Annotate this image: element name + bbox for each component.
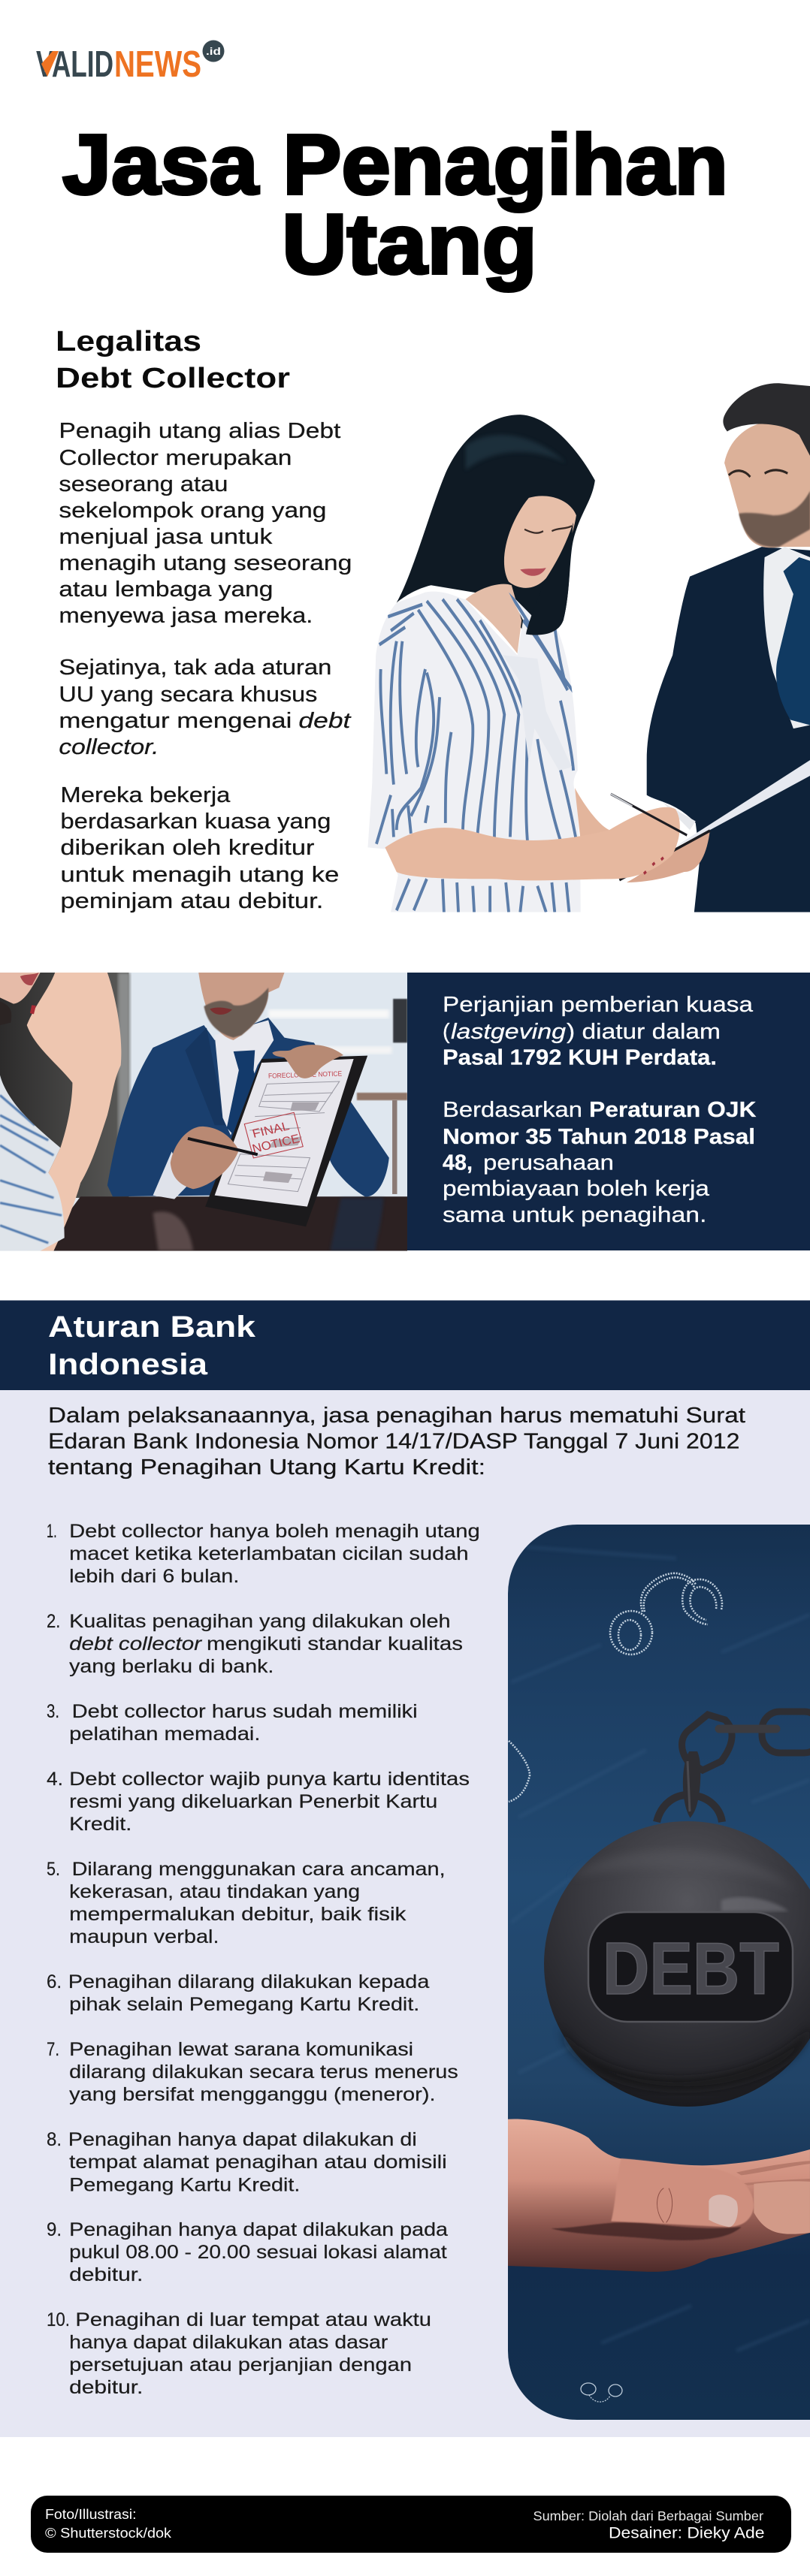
chalkboard brush streaks <box>511 1547 810 2351</box>
open hand <box>508 2119 810 2272</box>
logo: Validnews.id: NEWS <box>114 44 201 85</box>
rule 9: debitur. <box>69 2264 143 2285</box>
table <box>41 1196 407 1251</box>
heading: Legalitas Debt Collector <box>56 326 290 394</box>
rule 10: Penagihan di luar tempat atau waktu <box>75 2309 431 2330</box>
rule 2: mengikuti standar kualitas <box>207 1633 463 1654</box>
rule 4: 4. <box>47 1769 63 1790</box>
source and designer: Desainer: Dieky Ade <box>609 2525 765 2541</box>
rule 8: Penagihan hanya dapat dilakukan di <box>68 2129 417 2150</box>
rule 5: mempermalukan debitur, baik fisik <box>69 1904 407 1925</box>
source and designer <box>533 2508 765 2541</box>
rule 8: 8. <box>47 2129 62 2150</box>
text: Pasal 1792: ( <box>443 1020 450 1044</box>
text: Peraturan OJK: Peraturan OJK <box>589 1098 757 1122</box>
woman arm and hand <box>575 788 609 840</box>
rule 8: Pemegang Kartu Kredit. <box>69 2175 300 2196</box>
rule 1: 1. <box>47 1521 57 1542</box>
clipboard and man hand <box>627 830 710 882</box>
text block: definition of debt collector: seseorang atau <box>59 472 228 496</box>
panel: legal basis <box>407 973 810 1250</box>
section background: Aturan Bank Indonesia <box>0 1390 810 2437</box>
text: Peraturan OJK: Nomor 35 Tahun 2018 Pasal <box>443 1125 755 1149</box>
text block: intro regulation: Dalam pelaksanaannya, jasa penagihan harus mematuhi Surat <box>48 1404 745 1428</box>
heading band: Aturan Bank Indonesia <box>0 1301 810 1390</box>
rule 7: yang bersifat mengganggu (meneror). <box>69 2084 436 2105</box>
heading band: Aturan Bank Indonesia: Aturan Bank <box>48 1311 256 1344</box>
rule 5: maupun verbal. <box>69 1926 219 1947</box>
woman neck <box>466 584 521 653</box>
logo: Validnews.id <box>36 41 224 85</box>
text block: power of attorney: Mereka bekerja <box>60 783 231 807</box>
heading: Legalitas Debt Collector: Legalitas <box>56 326 201 357</box>
rule 6: 6. <box>47 1971 62 1992</box>
rule 4: Kredit. <box>69 1814 131 1835</box>
man suit <box>107 1018 389 1196</box>
text block: definition of debt collector: atau lembaga yang <box>59 578 273 602</box>
woman face <box>504 496 576 588</box>
rule 4: resmi yang dikeluarkan Penerbit Kartu <box>69 1791 437 1812</box>
text block: intro regulation: tentang Penagihan Utang Kartu Kredit: <box>48 1455 485 1480</box>
text block: definition of debt collector: menyewa jasa mereka. <box>59 604 313 628</box>
man suit <box>647 547 810 912</box>
rule 3 <box>47 1701 418 1745</box>
man tie <box>776 557 810 725</box>
source and designer: Sumber: Diolah dari Berbagai Sumber <box>533 2508 763 2523</box>
rule 4: Debt collector wajib punya kartu identitas <box>69 1769 470 1790</box>
text block: definition of debt collector: menagih utang seseorang <box>59 551 352 575</box>
woman blouse <box>367 592 581 912</box>
logo: Validnews.id: VALID <box>36 44 113 85</box>
rule 2: yang berlaku di bank. <box>69 1656 274 1677</box>
text block: power of attorney: berdasarkan kuasa yang <box>60 810 331 834</box>
rule 10: hanya dapat dilakukan atas dasar <box>69 2332 388 2353</box>
rule 6: pihak selain Pemegang Kartu Kredit. <box>69 1994 419 2015</box>
notice title: FORECLOSURE NOTICE <box>268 1070 342 1080</box>
notice paper <box>215 1059 354 1207</box>
rule 4 <box>47 1769 470 1835</box>
text: Pasal 1792: ) diatur dalam <box>567 1020 721 1044</box>
blouse stripes <box>376 593 576 912</box>
background room <box>0 973 407 1208</box>
photo credit: Foto/Illustrasi: <box>45 2506 137 2522</box>
rule 5: kekerasan, atau tindakan yang <box>69 1881 360 1902</box>
embossed word DEBT: DEBT <box>603 1927 779 2010</box>
rule 7: Penagihan lewat sarana komunikasi <box>69 2039 413 2060</box>
photo: man showing final notice <box>0 973 407 1251</box>
illustration: woman signing and man in suit <box>367 383 810 912</box>
rule 9: Penagihan hanya dapat dilakukan pada <box>69 2219 448 2240</box>
iron ball <box>544 1821 810 2107</box>
text block: definition of debt collector: Collector merupakan <box>59 446 292 470</box>
clipboard <box>205 1056 367 1226</box>
woman arm and hand <box>27 973 121 1251</box>
heading band: Aturan Bank Indonesia: Indonesia <box>48 1348 208 1381</box>
rule 10: persetujuan atau perjanjian dengan <box>69 2354 412 2375</box>
text: Peraturan OJK: Berdasarkan <box>443 1098 582 1122</box>
rule 5: Dilarang menggunakan cara ancaman, <box>72 1859 446 1880</box>
text block: definition of debt collector: Penagih utang alias Debt <box>59 419 340 443</box>
woman hair front lock <box>526 523 573 635</box>
rule 7 <box>47 2039 458 2105</box>
footer credits bar <box>31 2496 791 2553</box>
heading: Legalitas Debt Collector: Debt Collector <box>56 363 290 394</box>
rule 3: pelatihan memadai. <box>69 1724 260 1745</box>
stamp: final notice <box>244 1112 303 1158</box>
rule 1: Debt collector hanya boleh menagih utang <box>69 1521 480 1542</box>
text: Peraturan OJK: 48, <box>443 1151 473 1175</box>
woman hair <box>397 415 595 635</box>
text block: no specific law: Sejatinya, tak ada aturan <box>59 656 331 680</box>
rule 3: 3. <box>47 1701 59 1722</box>
stamp: final notice: NOTICE <box>251 1132 301 1156</box>
rule 9 <box>47 2219 448 2285</box>
text block: no specific law: UU yang secara khusus <box>59 683 317 707</box>
small chalk handcuffs <box>581 2383 622 2402</box>
man head <box>724 421 810 547</box>
title: Jasa Penagihan <box>62 117 728 212</box>
woman blouse <box>0 1075 65 1251</box>
text block: power of attorney: untuk menagih utang ke <box>60 863 339 887</box>
rule 5 <box>47 1859 446 1947</box>
text: Peraturan OJK: perusahaan <box>483 1151 614 1175</box>
text block: definition of debt collector: sekelompok orang yang <box>59 499 326 523</box>
rule 6: Penagihan dilarang dilakukan kepada <box>68 1971 429 1992</box>
text block: intro regulation <box>48 1404 745 1480</box>
rule 1 <box>47 1521 480 1587</box>
man head <box>198 973 285 1040</box>
text: Peraturan OJK: pembiayaan boleh kerja <box>443 1177 710 1201</box>
list: rules 1 to 10 <box>47 1521 480 2398</box>
rule 7: dilarang dilakukan secara terus menerus <box>69 2062 458 2083</box>
text block: power of attorney <box>60 783 339 913</box>
rule 1: macet ketika keterlambatan cicilan sudah <box>69 1543 469 1564</box>
rule 2: debt collector <box>69 1633 203 1654</box>
rule 8 <box>47 2129 447 2196</box>
title: Utang <box>282 197 537 291</box>
rule 1: lebih dari 6 bulan. <box>69 1566 239 1587</box>
man shirt and tie <box>215 1020 274 1136</box>
text: Peraturan OJK <box>443 1098 757 1227</box>
rule 2 <box>47 1611 463 1677</box>
text block: definition of debt collector: menjual jasa untuk <box>59 525 273 549</box>
illustration: debt ball over open hand <box>508 1525 810 2420</box>
rule 2: Kualitas penagihan yang dilakukan oleh <box>69 1611 450 1632</box>
text block: intro regulation: Edaran Bank Indonesia Nomor 14/17/DASP Tanggal 7 Juni 2012 <box>48 1430 740 1454</box>
stamp: final notice: FINAL <box>251 1119 291 1141</box>
text block: definition of debt collector <box>59 419 352 628</box>
blouse bow <box>503 655 572 771</box>
rule 10: debitur. <box>69 2377 143 2398</box>
text: Peraturan OJK: sama untuk penagihan. <box>443 1203 706 1227</box>
text: Pasal 1792 <box>443 993 754 1069</box>
rule 3: Debt collector harus sudah memiliki <box>72 1701 418 1722</box>
rule 8: tempat alamat penagihan atau domisili <box>69 2152 447 2173</box>
photo credit <box>45 2506 172 2541</box>
chalk handcuffs <box>509 1573 722 1802</box>
text: Pasal 1792: Perjanjian pemberian kuasa <box>443 993 754 1017</box>
rule 9: 9. <box>47 2219 62 2240</box>
text block: no specific law: debt <box>298 709 352 733</box>
text block: no specific law: collector. <box>59 735 159 759</box>
text: Pasal 1792: Pasal 1792 KUH Perdata. <box>443 1045 717 1069</box>
hand with pen and cuff <box>153 1151 188 1199</box>
rule 10 <box>47 2309 431 2398</box>
chain <box>657 1712 810 1822</box>
text block: no specific law <box>59 656 352 759</box>
clip and top hand <box>272 1045 343 1078</box>
rule 5: 5. <box>47 1859 60 1880</box>
man shirt <box>763 547 810 728</box>
logo: Validnews.id: .id <box>206 45 221 57</box>
pen <box>611 794 687 835</box>
form lines <box>228 1081 340 1192</box>
rule 7: 7. <box>47 2039 59 2060</box>
rule 6 <box>47 1971 429 2015</box>
title <box>62 117 728 291</box>
text block: no specific law: mengatur mengenai <box>59 709 292 733</box>
rule 10: 10. <box>47 2309 70 2330</box>
rule 9: pukul 08.00 - 20.00 sesuai lokasi alamat <box>69 2242 447 2263</box>
photo credit: © Shutterstock/dok <box>45 2525 172 2541</box>
rule 2: 2. <box>47 1611 60 1632</box>
text block: power of attorney: diberikan oleh kreditur <box>60 836 315 860</box>
thumb nail <box>709 2194 738 2227</box>
text block: power of attorney: peminjam atau debitur. <box>60 889 323 913</box>
text: Pasal 1792: lastgeving <box>451 1020 566 1044</box>
woman face and hair <box>0 973 41 1004</box>
